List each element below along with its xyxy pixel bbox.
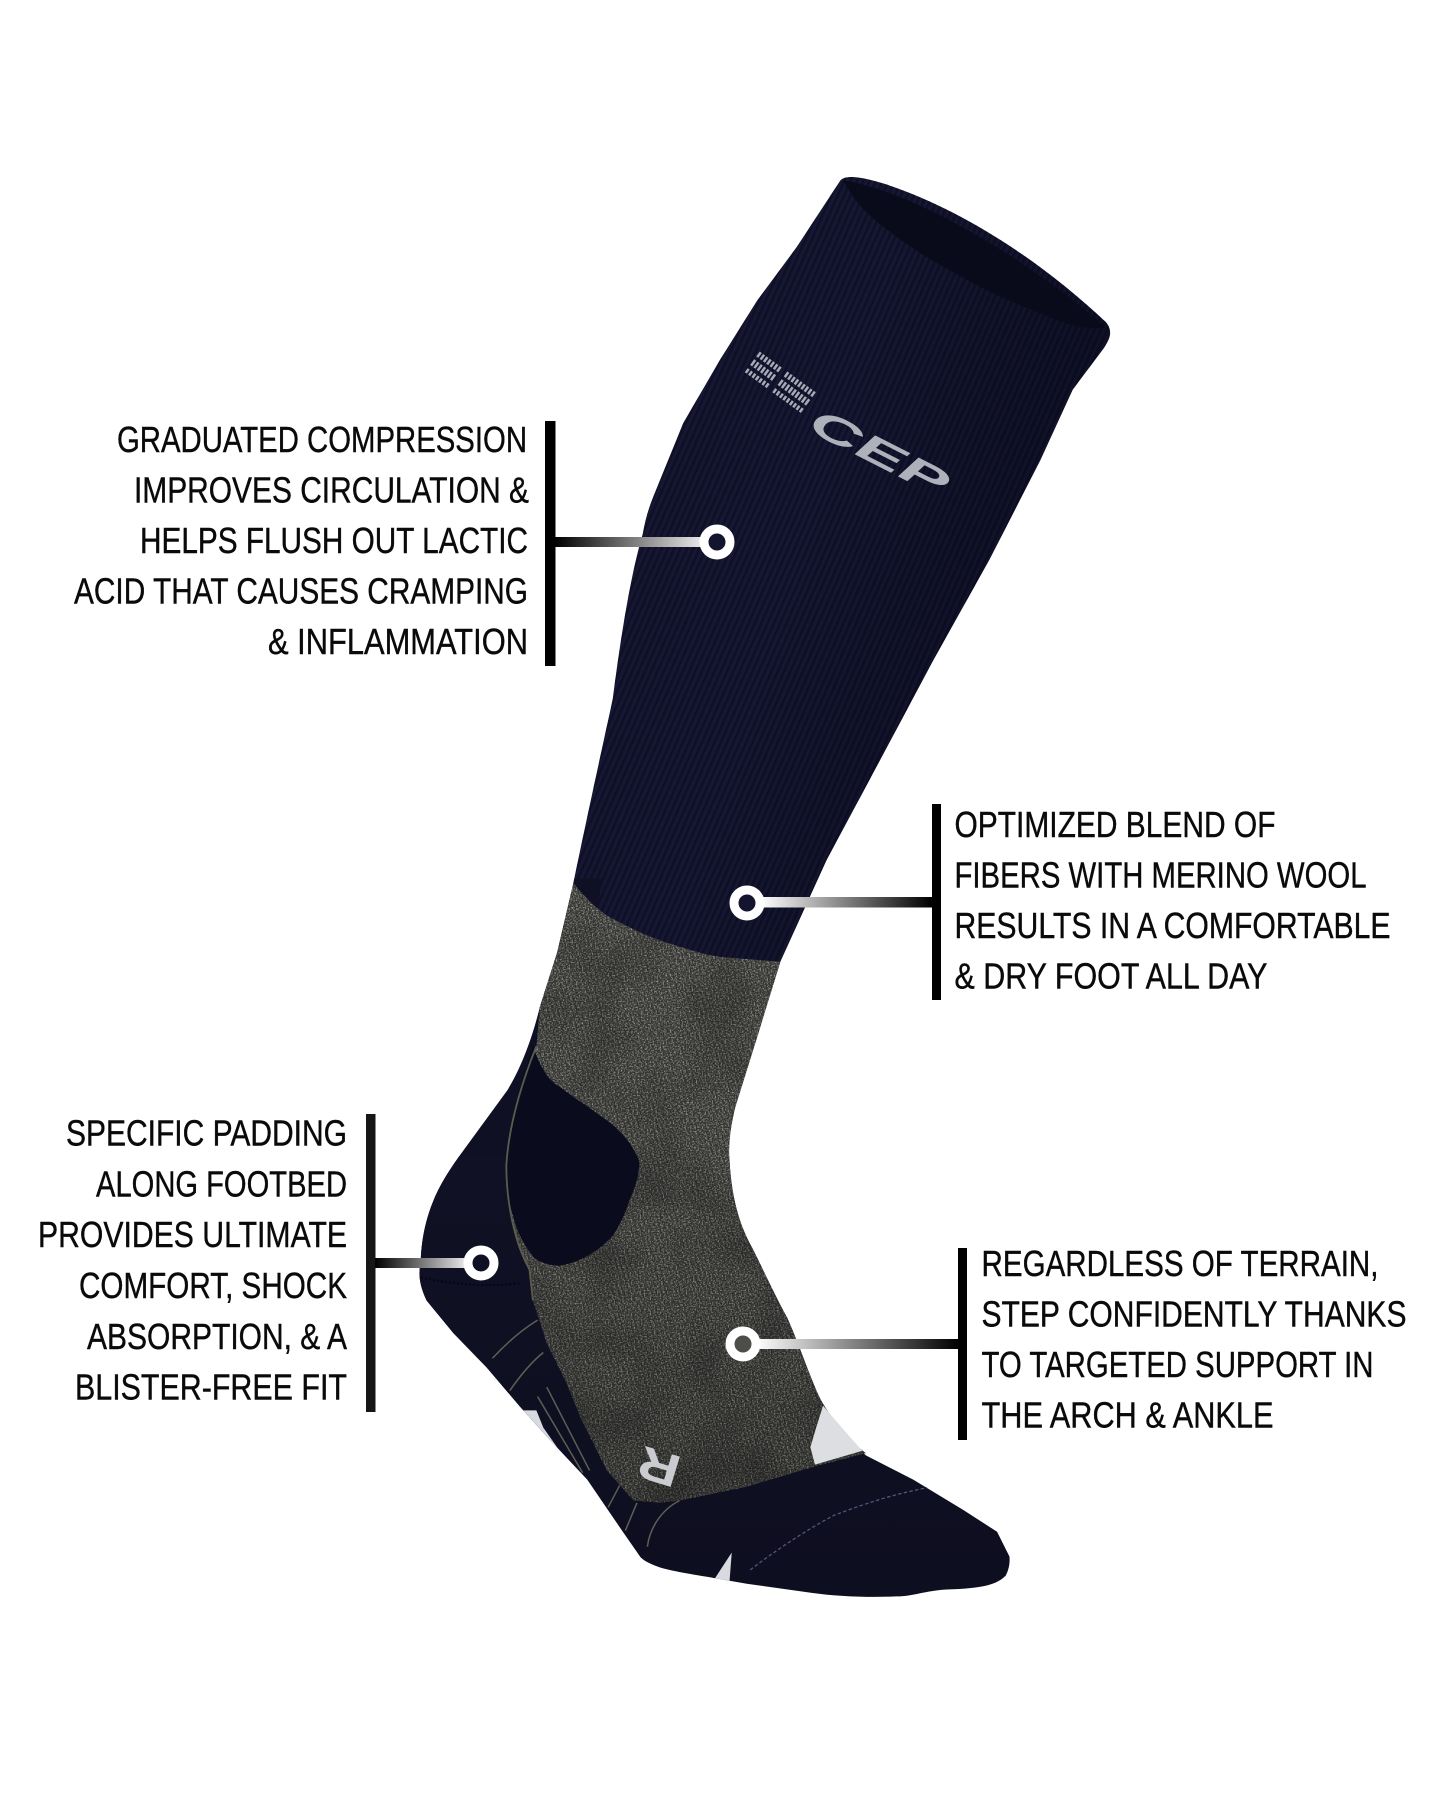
callout text: [954, 804, 1390, 996]
callout text: OPTIMIZED BLEND OF: [954, 804, 1276, 845]
callout text: COMFORT, SHOCK: [79, 1265, 347, 1306]
callout bar: [932, 804, 941, 1000]
sock: sole stitching lines: [492, 1320, 680, 1547]
sock: toe seam: [750, 1488, 927, 1570]
callout: merino blend: [734, 804, 1390, 1000]
callout text: [38, 1112, 347, 1408]
callout text: HELPS FLUSH OUT LACTIC: [140, 520, 528, 561]
callout dot: [704, 529, 730, 555]
callout text: [74, 419, 529, 662]
callout text: GRADUATED COMPRESSION: [117, 419, 527, 460]
callout: specific padding: [38, 1112, 494, 1412]
logo: CEP stripes: [746, 354, 815, 411]
R size mark: R: [632, 1435, 687, 1497]
callout bar: [958, 1248, 967, 1440]
callout text: PROVIDES ULTIMATE: [38, 1214, 347, 1255]
callout text: ABSORPTION, & A: [87, 1316, 347, 1357]
callout text: THE ARCH & ANKLE: [982, 1394, 1274, 1436]
callout: graduated compression: [74, 419, 730, 666]
sock: dark ankle padding: [506, 1046, 639, 1266]
sock: heel knit line: [421, 1277, 520, 1285]
callout dot: [730, 1331, 756, 1357]
callout connector: [375, 1258, 475, 1268]
callout text: [982, 1243, 1406, 1436]
callout connector: [755, 1339, 958, 1349]
callout text: & DRY FOOT ALL DAY: [954, 956, 1268, 996]
sock: navy compression leg: [405, 162, 1144, 1618]
sock: sole white marks: [523, 1410, 732, 1583]
callout text: ACID THAT CAUSES CRAMPING: [74, 570, 528, 612]
sock illustration: [405, 162, 1144, 1618]
callout text: ALONG FOOTBED: [96, 1164, 347, 1204]
callout dot: [468, 1250, 494, 1276]
callout text: IMPROVES CIRCULATION &: [134, 470, 529, 510]
sock: ankle seam: [506, 1046, 536, 1300]
callout connector: [555, 537, 716, 547]
sock: light arch patch: [810, 1406, 862, 1465]
logo: CEP wordmark: CEP: [802, 400, 956, 506]
callout text: & INFLAMMATION: [268, 621, 528, 662]
sock: inner cuff opening: [843, 180, 1105, 328]
callout: targeted support: [730, 1243, 1406, 1440]
callout bar: [366, 1114, 376, 1412]
callout dot: [734, 890, 760, 916]
sock: grey merino wool section: [510, 883, 866, 1503]
callout bar: [545, 421, 556, 666]
callout connector: [760, 897, 932, 908]
callout text: SPECIFIC PADDING: [66, 1112, 347, 1154]
callout text: BLISTER-FREE FIT: [75, 1366, 347, 1408]
